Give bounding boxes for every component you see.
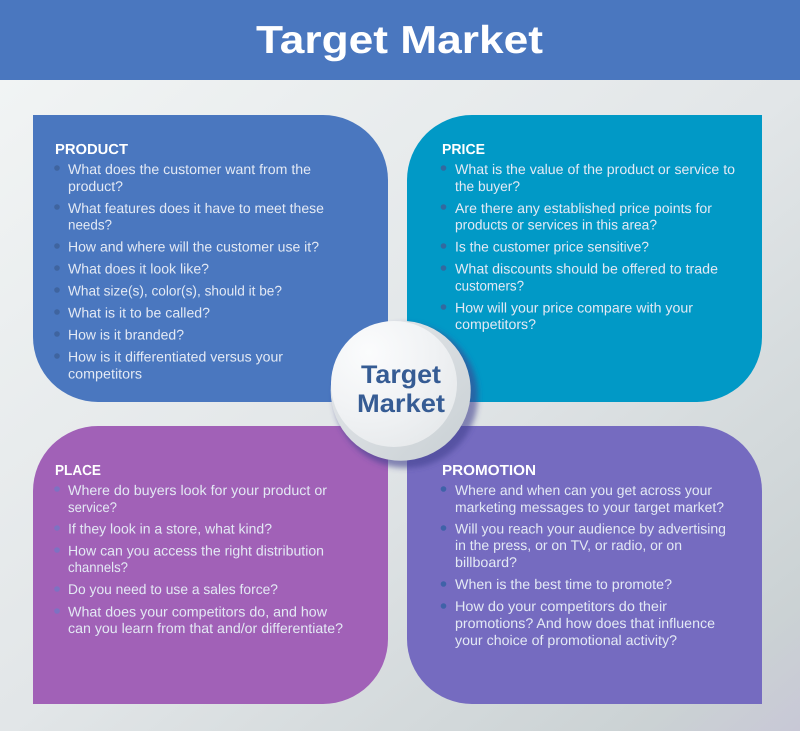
product questions: product? — [68, 178, 123, 194]
price bullets — [441, 165, 446, 310]
promotion questions: How do your competitors do their — [455, 598, 667, 614]
place questions: What does your competitors do, and how — [68, 604, 328, 620]
product questions: What is it to be called? — [68, 304, 210, 320]
product questions: What features does it have to meet these — [68, 200, 324, 216]
badge shadow — [334, 324, 478, 468]
badge label — [357, 361, 446, 418]
promotion questions: marketing messages to your target market? — [455, 499, 724, 515]
place questions: Do you need to use a sales force? — [68, 581, 278, 597]
price panel background — [407, 115, 762, 402]
price questions: How will your price compare with your — [455, 300, 693, 316]
promotion questions: When is the best time to promote? — [455, 576, 672, 592]
product questions: How is it branded? — [68, 326, 184, 342]
promotion heading: PROMOTION — [442, 463, 536, 479]
price questions: customers? — [455, 278, 524, 294]
place questions — [68, 482, 343, 636]
promotion panel background — [407, 426, 762, 704]
place questions: How can you access the right distribution — [68, 542, 324, 558]
product questions: competitors — [68, 366, 142, 382]
price questions — [455, 161, 735, 332]
price questions: products or services in this area? — [455, 216, 657, 232]
product questions: What does the customer want from the — [68, 161, 311, 177]
product questions: How and where will the customer use it? — [68, 238, 319, 254]
place heading: PLACE — [55, 463, 101, 479]
place questions: service? — [68, 499, 117, 515]
promotion questions: promotions? And how does that influence — [455, 615, 715, 631]
badge rim — [331, 321, 471, 461]
promotion questions: your choice of promotional activity? — [455, 632, 677, 648]
header banner — [0, 0, 800, 80]
panel: promotion — [407, 426, 762, 704]
place questions: can you learn from that and/or differentiate? — [68, 620, 343, 636]
product bullets — [54, 165, 60, 359]
promotion questions: in the press, or on TV, or radio, or on — [455, 537, 682, 553]
place bullets — [54, 486, 60, 614]
panel: place — [33, 426, 388, 704]
price questions: Are there any established price points for — [455, 200, 712, 216]
place questions: channels? — [68, 559, 128, 575]
promotion questions: Will you reach your audience by advertising — [455, 520, 726, 536]
price heading: PRICE — [442, 142, 485, 158]
promotion questions: Where and when can you get across your — [455, 482, 712, 498]
badge label: Market — [357, 390, 446, 418]
center badge — [331, 321, 478, 468]
promotion questions — [455, 482, 726, 648]
product questions: needs? — [68, 216, 112, 232]
price questions: competitors? — [455, 316, 536, 332]
product questions: What size(s), color(s), should it be? — [68, 282, 282, 298]
place questions: If they look in a store, what kind? — [68, 520, 272, 536]
badge label: Target — [361, 361, 442, 389]
promotion bullets — [441, 486, 446, 609]
place questions: Where do buyers look for your product or — [68, 482, 327, 498]
panel: product — [33, 115, 388, 402]
price questions: the buyer? — [455, 178, 520, 194]
title: Target Market — [256, 19, 543, 62]
product questions — [68, 161, 324, 382]
price questions: What discounts should be offered to trade — [455, 260, 718, 276]
price questions: What is the value of the product or service to — [455, 161, 735, 177]
product heading: PRODUCT — [55, 142, 128, 158]
product questions: How is it differentiated versus your — [68, 348, 283, 364]
price questions: Is the customer price sensitive? — [455, 238, 649, 254]
place panel background — [33, 426, 388, 704]
promotion questions: billboard? — [455, 554, 517, 570]
product panel background — [33, 115, 388, 402]
panel: price — [407, 115, 762, 402]
badge face — [331, 321, 457, 447]
product questions: What does it look like? — [68, 260, 209, 276]
